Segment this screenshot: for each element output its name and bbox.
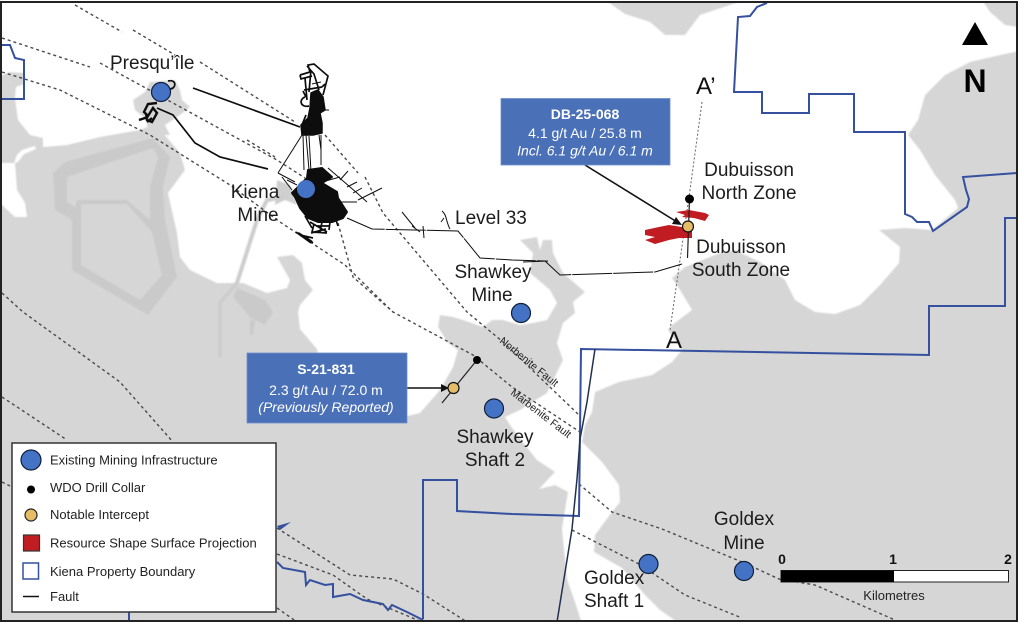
section labels A and A' (666, 73, 716, 354)
callout: DB-25-068: 4.1 g/t Au / 25.8 m (528, 125, 642, 141)
place labels: Shawkey (454, 262, 532, 283)
legend item: fault (23, 592, 79, 601)
legend item: existing mining infrastructure (21, 450, 218, 470)
place labels: Shaft 2 (465, 450, 525, 471)
legend item: drill collar: WDO Drill Collar (50, 480, 146, 495)
regional fault solid line (557, 349, 595, 622)
place labels: Goldex (714, 509, 775, 530)
place labels (110, 53, 797, 612)
place labels: Presqu’île (110, 53, 194, 74)
cross-section line A to A' (670, 102, 702, 330)
place labels: Dubuisson (696, 237, 786, 258)
legend item: fault: Fault (50, 589, 79, 604)
resource shape: Dubuisson North Zone (676, 210, 709, 221)
callout: S-21-831: S-21-831 (297, 361, 355, 377)
place labels: Dubuisson (704, 160, 794, 181)
legend item: resource shape: Resource Shape Surface Projection (50, 536, 257, 550)
place labels: South Zone (692, 260, 790, 281)
icon: DB collar (685, 194, 694, 204)
north arrow (962, 22, 988, 99)
arrow: DB-25-068 to intercept (585, 165, 682, 225)
place labels: Shaft 1 (584, 591, 644, 612)
callout: S-21-831: (Previously Reported) (258, 399, 394, 415)
scale bar (778, 554, 1012, 600)
tailings facility outline (53, 138, 285, 357)
icon: DB intercept (682, 221, 694, 232)
scale bar: 1 (889, 551, 897, 567)
legend item: existing mining infrastructure: Existing Mining Infrastructure (50, 452, 218, 468)
fault labels: Marbenite Fault (508, 387, 573, 441)
legend item: property boundary: Kiena Property Boundary (50, 564, 196, 579)
infrastructure markers (152, 82, 754, 580)
scale bar: Kilometres (863, 588, 925, 603)
place labels: Kiena (231, 182, 280, 203)
place labels: Shawkey (456, 427, 534, 448)
legend item: drill collar (27, 482, 146, 494)
workings: Level 33 drift (347, 211, 682, 275)
icon: S-21-831 intercept (448, 382, 459, 394)
callout leader: DB-25-068 drill trace (585, 165, 709, 258)
place labels: North Zone (701, 183, 797, 204)
resource shape: Dubuisson South Zone (645, 225, 692, 244)
place labels: Mine (237, 205, 279, 226)
place labels: Level 33 (455, 208, 527, 229)
legend item: notable intercept: Notable Intercept (50, 507, 149, 522)
legend (12, 443, 276, 612)
scale bar: 0 (778, 551, 786, 567)
fault labels: Norbenite Fault (497, 335, 561, 390)
callout: S-21-831 (247, 353, 407, 423)
north arrow: N (963, 63, 987, 99)
underground workings (139, 64, 682, 275)
workings: Kiena north mass (278, 64, 329, 182)
workings: Kiena main mass (282, 168, 382, 243)
callout: DB-25-068 (501, 98, 670, 165)
callout: DB-25-068: DB-25-068 (551, 106, 619, 122)
place labels: Mine (471, 285, 513, 306)
fault labels (497, 335, 573, 441)
place labels: Mine (723, 533, 765, 554)
icon: S-21-831 collar (473, 356, 481, 364)
scale bar: 2 (1004, 551, 1012, 567)
callout: DB-25-068: Incl. 6.1 g/t Au / 6.1 m (517, 142, 653, 158)
section labels A and A': A (666, 327, 682, 354)
workings: Presqu'ile drifts (139, 81, 300, 169)
S-21-831 drill trace (407, 356, 481, 403)
arrow: S-21-831 to intercept (407, 384, 449, 392)
section labels A and A': A’ (696, 73, 716, 100)
callout: S-21-831: 2.3 g/t Au / 72.0 m (269, 382, 383, 398)
place labels: Goldex (584, 568, 645, 589)
